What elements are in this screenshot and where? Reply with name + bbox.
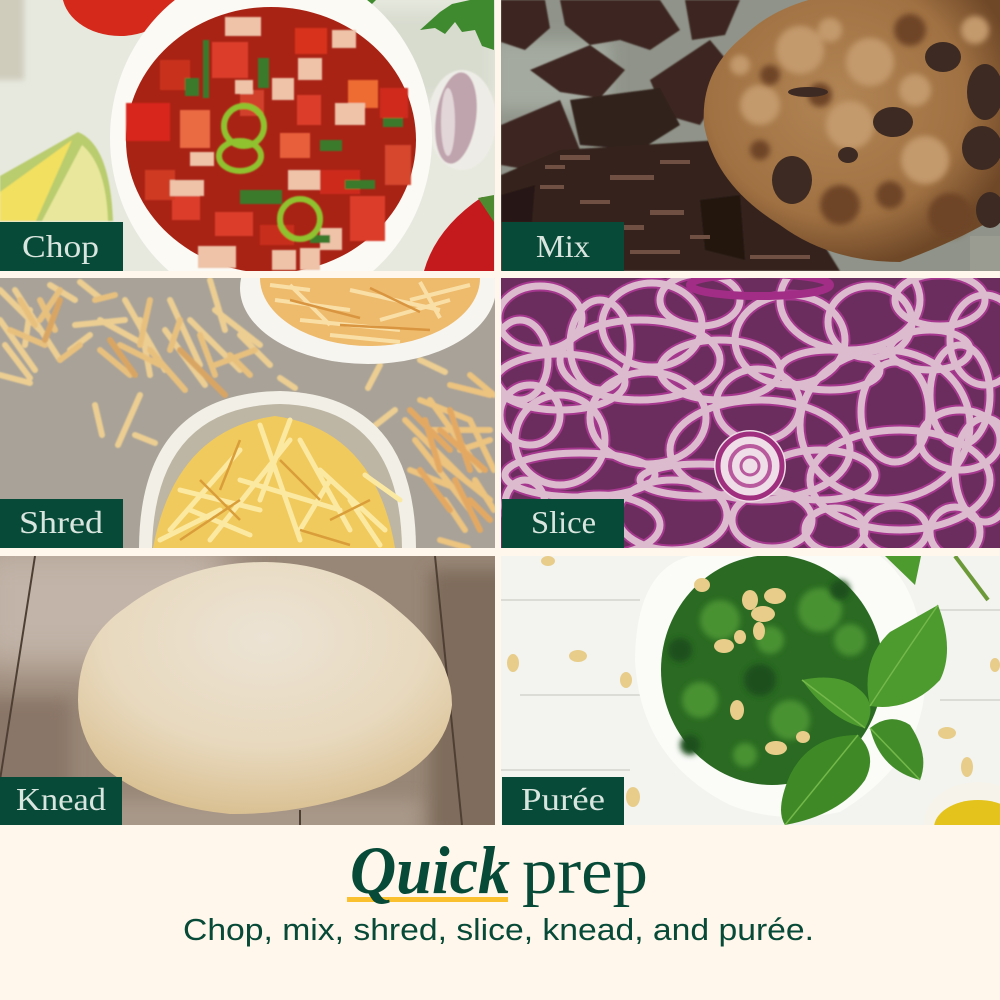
panel: puree <box>501 556 1000 825</box>
icon: cookie <box>704 0 1000 262</box>
panel: chop <box>0 0 495 271</box>
icon: pine nuts <box>507 556 1000 807</box>
label: mix: Mix <box>536 228 590 264</box>
panel: slice <box>501 278 1000 548</box>
panel: knead <box>0 556 495 825</box>
icon: top bowl of cheese <box>240 278 495 364</box>
icon: red onion rings <box>501 278 1000 548</box>
label: shred: Shred <box>19 504 103 540</box>
label: knead: Knead <box>16 781 106 817</box>
subtitle: Chop, mix, shred, slice, knead, and purée. <box>183 913 814 947</box>
label: puree <box>502 777 624 825</box>
icon: basil leaves <box>781 556 988 825</box>
icon: pesto bowl <box>640 556 880 785</box>
icon: scattered cheese <box>0 280 494 548</box>
label: chop <box>0 222 123 271</box>
label: chop: Chop <box>22 228 99 264</box>
icon: lime wedge <box>0 132 113 221</box>
label: slice: Slice <box>531 504 596 540</box>
panel: mix <box>490 0 1000 271</box>
icon: garlic <box>430 70 494 164</box>
icon: oil dish <box>934 800 1000 825</box>
label: mix <box>502 222 624 271</box>
panel: shred <box>0 278 495 548</box>
title: Quick <box>350 832 510 908</box>
icon: tomato <box>62 0 178 36</box>
title <box>347 832 648 908</box>
icon: central onion slice <box>714 430 786 502</box>
icon: parsley <box>367 0 494 50</box>
title: prep <box>522 835 648 908</box>
icon: bowl of salsa <box>110 0 432 271</box>
label: slice <box>502 499 624 548</box>
icon: bottom bowl of cheese <box>139 391 416 548</box>
label: puree: Purée <box>521 781 605 817</box>
icon: chopped chocolate <box>501 0 840 271</box>
icon: chili pepper <box>424 197 494 271</box>
label: knead <box>0 777 122 825</box>
label: shred <box>0 499 123 548</box>
icon: ball of dough <box>78 562 452 814</box>
